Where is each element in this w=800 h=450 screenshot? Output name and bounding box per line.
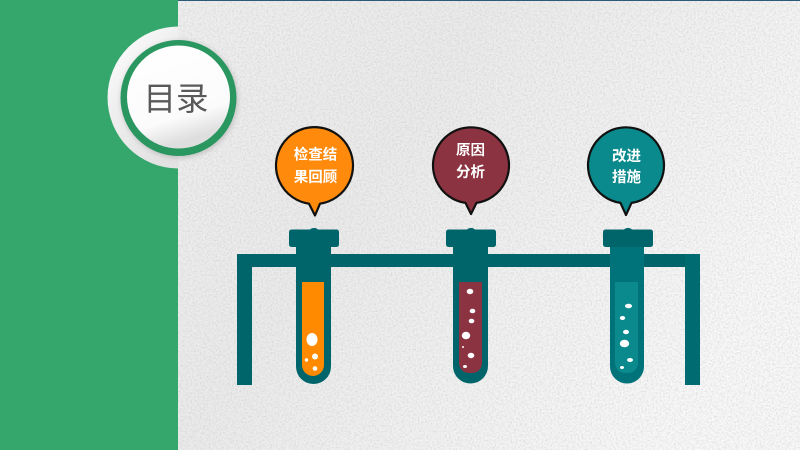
speech bubble 2: 分析 [456,163,485,181]
speech bubble 1: 果回顾 [294,169,338,186]
speech bubble 2: 原因 [456,142,485,159]
speech bubble 3 [588,127,664,215]
speech bubble 3: 措施 [612,168,641,186]
speech bubble 2 [433,127,509,214]
test tube 3: teal [603,228,653,384]
title badge [108,26,239,168]
textured grey background [178,0,800,450]
speech bubble 3: 改进 [612,148,641,165]
test tube rack [237,254,700,385]
green side panel [0,0,178,450]
title: 目录 [143,81,209,117]
test tube 2: maroon [446,228,496,384]
speech bubble 1: 检查结 [294,146,337,164]
test tube 1: orange [289,228,339,384]
speech bubble 1 [276,127,353,216]
